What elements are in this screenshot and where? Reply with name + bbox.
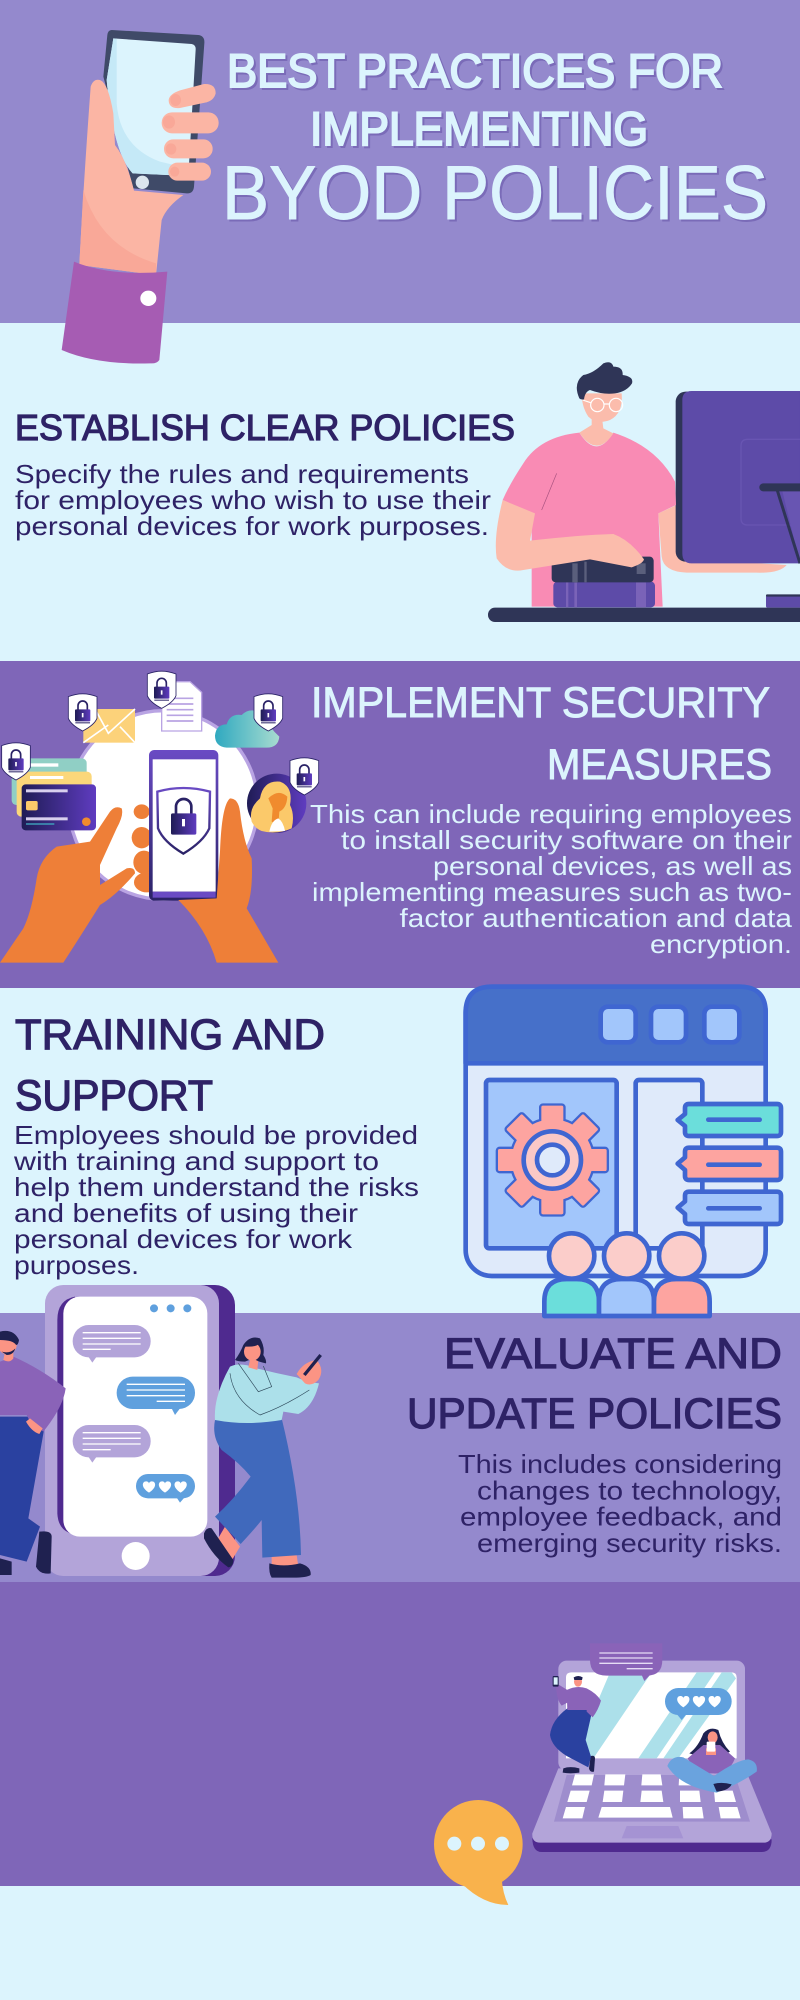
text: evaluate and update policies body: [458, 1449, 782, 1558]
team members: [544, 1233, 710, 1316]
laptop base shadow: [532, 1838, 772, 1852]
background circle: [69, 711, 258, 899]
text: evaluate and update policies body: This includes considering: [458, 1449, 782, 1479]
small woman sitting: [667, 1729, 757, 1793]
text: training and support body: help them understand the risks: [14, 1172, 419, 1202]
books: [553, 582, 655, 607]
text: evaluate and update policies body: changes to technology,: [477, 1476, 782, 1506]
sleeve cuff: [62, 262, 167, 363]
top chat bubble: [590, 1643, 662, 1681]
text: establish clear policies body: personal devices for work purposes.: [15, 511, 489, 541]
text: evaluate and update policies body: employee feedback, and: [460, 1502, 782, 1532]
laptop lid: [558, 1661, 745, 1771]
chat bubble 2: [117, 1377, 195, 1415]
text: training and support body: and benefits of using their: [14, 1198, 358, 1228]
window: [466, 987, 766, 1276]
title: [222, 44, 768, 236]
window header: [466, 987, 766, 1063]
small man: [550, 1676, 601, 1773]
monitor base: [766, 595, 800, 608]
title: IMPLEMENTING: [310, 102, 648, 155]
man standing: [0, 1331, 66, 1575]
title: BEST PRACTICES FOR: [227, 44, 723, 97]
text: training and support body: personal devices for work: [14, 1224, 353, 1254]
monitor: [676, 392, 800, 562]
left arm and hand: [496, 500, 644, 571]
text: training and support body: with training and support to: [13, 1146, 379, 1176]
fingers behind phone: [132, 804, 159, 892]
panel: bottom strip: [0, 1886, 800, 2000]
neck and face: [579, 415, 613, 446]
heading: implement security measures: MEASURES: [547, 741, 772, 789]
text: establish clear policies body: Specify the rules and requirements: [15, 459, 469, 489]
envelope: [83, 709, 135, 743]
shirt: [503, 433, 676, 607]
text: implement security measures body: [310, 799, 793, 959]
phone: [149, 750, 218, 901]
text: evaluate and update policies body: emerging security risks.: [477, 1528, 782, 1558]
heading: implement security measures: IMPLEMENT SECURITY: [311, 679, 770, 727]
cloud: [215, 710, 279, 748]
chat bubble 3: [73, 1425, 151, 1463]
panel: training and support background: [0, 988, 800, 1313]
phone front: [45, 1285, 219, 1576]
credit cards: [12, 758, 87, 805]
icon: hand holding phone: [62, 30, 219, 363]
icon: phone security illustration: [0, 671, 319, 963]
panel: implement security measures background: [0, 661, 800, 988]
title: BYOD POLICIES: [222, 151, 768, 236]
right arm: [658, 505, 787, 573]
glasses: [583, 398, 623, 412]
fingers: [169, 84, 216, 108]
icon: laptop with people: [532, 1643, 772, 1852]
text: establish clear policies body: for employees who wish to use their: [15, 485, 491, 515]
panel: footer illustration background: [0, 1582, 800, 1886]
phone shield: [157, 788, 210, 854]
heading: implement security measures: [311, 679, 772, 789]
heading: training and support: TRAINING AND: [15, 1011, 325, 1059]
text: implement security measures body: personal devices, as well as: [433, 851, 792, 881]
phone body: [103, 30, 204, 193]
heading: evaluate and update policies: EVALUATE AND: [444, 1330, 782, 1378]
hair: [577, 362, 632, 400]
window buttons: [601, 1007, 739, 1042]
icon: orange speech bubble: [434, 1800, 523, 1905]
desk: [488, 608, 800, 622]
right panel: [636, 1080, 702, 1248]
heading: training and support: SUPPORT: [15, 1072, 213, 1120]
text: implement security measures body: implementing measures such as two-: [312, 877, 792, 907]
laptop screen: [566, 1672, 737, 1758]
heart bubble: [136, 1474, 195, 1503]
right hand: [178, 798, 278, 963]
laptop base: [532, 1768, 772, 1843]
panel: evaluate and update policies background: [0, 1313, 800, 1582]
heading: evaluate and update policies: UPDATE POLICIES: [407, 1390, 782, 1438]
text: training and support body: Employees should be provided: [14, 1120, 418, 1150]
phone back: [100, 1285, 235, 1576]
heading: training and support: [15, 1011, 325, 1120]
left panel: [486, 1080, 617, 1248]
text: implement security measures body: encryption.: [650, 929, 792, 959]
woman with phone: [204, 1337, 321, 1578]
text: establish clear policies body: [15, 459, 491, 541]
icon: man at desk with monitor: [488, 362, 800, 622]
text: training and support body: [13, 1120, 419, 1280]
heading: evaluate and update policies: [407, 1330, 782, 1438]
palm and thumb: [79, 80, 183, 275]
panel: hero background: [0, 0, 800, 323]
text: implement security measures body: This can include requiring employees: [310, 799, 792, 829]
panel: establish clear policies background: [0, 323, 800, 661]
avatar: [247, 774, 306, 833]
message bubbles: [678, 1104, 781, 1224]
phone screen: [63, 1297, 207, 1537]
document: [162, 682, 202, 731]
text: training and support body: purposes.: [14, 1250, 139, 1280]
chat bubble 1: [73, 1325, 151, 1363]
keyboard keys: [563, 1774, 741, 1818]
left hand: [0, 807, 135, 963]
phone screen: [107, 38, 196, 176]
text: implement security measures body: factor authentication and data: [400, 903, 793, 933]
icon: settings window with team: [466, 987, 781, 1316]
hearts chat bubble: [665, 1688, 732, 1720]
gear: [498, 1106, 607, 1214]
heading: establish clear policies: ESTABLISH CLEAR POLICIES: [15, 407, 515, 448]
text: implement security measures body: to install security software on their: [341, 825, 792, 855]
security shields: [68, 694, 97, 731]
icon: people with giant phone: [0, 1285, 321, 1578]
